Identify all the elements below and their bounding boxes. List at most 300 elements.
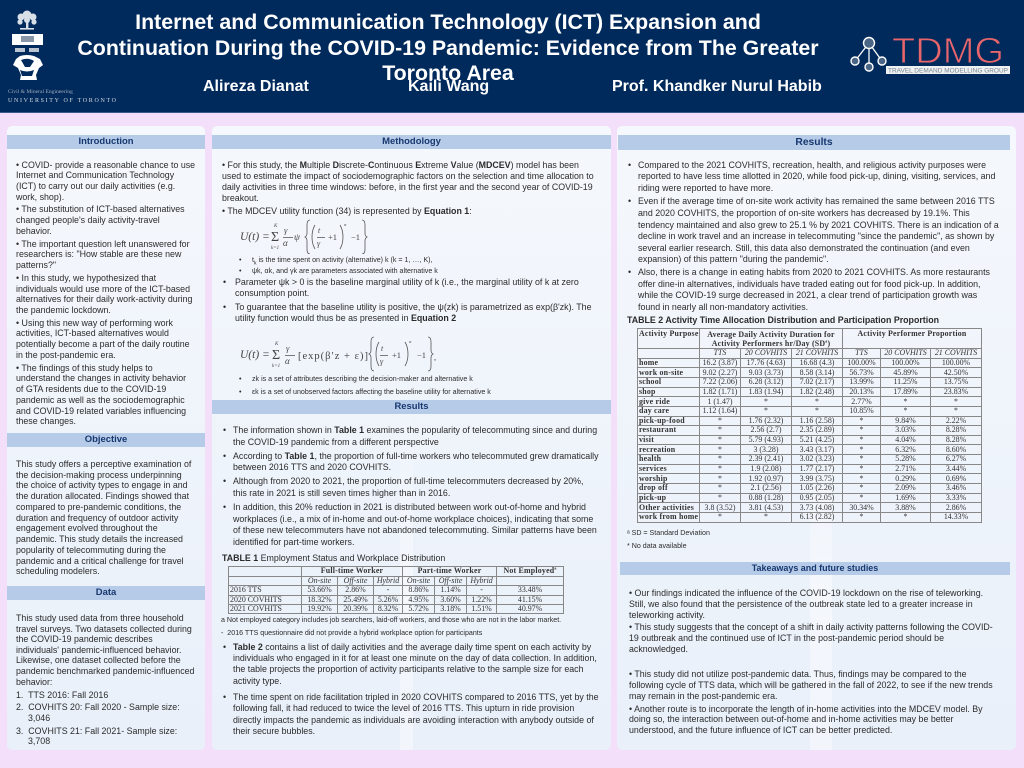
table 2: 5.28%	[895, 455, 916, 463]
text: takeaways part 2: understood, and the future influence of ICT can be better predicted.	[629, 725, 892, 735]
text: right results bullets: and 2020 COVHITS, the proportion of on-site workers has decreased by 19.1%. This	[638, 208, 970, 218]
text: introduction bullets: pandemic as well as the sociodemographic	[16, 395, 185, 405]
table 2: *	[860, 484, 863, 492]
text: right results bullets: Even if the average time of on-site work activity has remained the same between 2016 TTS	[638, 196, 995, 206]
text: parameter note: To guarantee that the baseline utility is positive, the ψ(zk) is parametrized as exp(β'zk). The	[235, 302, 592, 312]
list: data sources: 3,708	[28, 736, 50, 746]
equation 1: K	[273, 224, 278, 229]
table 2: worship	[639, 474, 668, 483]
text: objective: the choice of activity types to engage in and	[16, 480, 188, 490]
table 2: 14.33%	[944, 512, 968, 521]
table 2: 45.89%	[893, 368, 918, 377]
text: objective: pandemic and a critical challenge for travel	[16, 556, 184, 566]
table 2: 1.83 (1.94)	[749, 387, 783, 396]
text: introduction bullets: and COVID-19 related variables influencing	[16, 406, 186, 416]
text: table 2 commentary: the table projects the proportion of activity participants relative to the sample size for each	[233, 664, 584, 674]
author: Prof. Khandker Nurul Habib: Prof. Khandker Nurul Habib	[612, 78, 822, 95]
text: data description: travel surveys. Two datasets collected during	[16, 624, 192, 634]
heading: Table 1 caption: TABLE 1 Employment Status and Workplace Distribution	[222, 552, 445, 562]
text: •	[223, 425, 226, 435]
table 2: 2.1 (2.56)	[751, 484, 781, 492]
heading: Results (right)	[618, 134, 1010, 150]
text: results bullets: the COVID-19 pandemic from a different perspective	[233, 437, 439, 447]
equation 1: −1	[351, 232, 360, 242]
text: table 2 commentary: individuals who engaged in it for at least one minute on the day of data collection. In addition,	[233, 653, 597, 663]
heading: Objective	[7, 433, 205, 447]
table 2: 3.81 (4.53)	[749, 503, 783, 512]
equation 2: −1	[417, 350, 426, 360]
text: introduction bullets: (ICT) to carry out our daily activities (e.g.	[16, 181, 175, 191]
table 2: 100.00%	[891, 358, 920, 367]
heading: Results (right): Results	[795, 136, 833, 148]
text: equation 2 notes: εk is a set of unobserved factors affecting the baseline utility for alternative k	[252, 388, 491, 396]
text: objective	[16, 459, 192, 576]
text: table 2 commentary	[223, 642, 599, 736]
table 2: 1.92 (0.97)	[749, 474, 783, 483]
text: methodology intro: • For this study, the Multiple Discrete-Continuous Extreme Value (MDCEV) model has been	[222, 160, 579, 170]
text: objective: the decision-making process underpinning	[16, 470, 182, 480]
heading: Data: Data	[96, 587, 116, 598]
equation 2: t	[381, 344, 384, 353]
table 2: *	[718, 426, 722, 434]
table 2: 8.58 (3.14)	[800, 368, 834, 377]
table 2: services	[639, 464, 667, 473]
equation 1: γ	[284, 225, 288, 235]
text: introduction bullets: • The substitution of ICT-based alternatives	[16, 204, 185, 214]
text: takeaways part 1: • This study suggests that the concept of a shift in daily activity patterns following the COVID-	[629, 622, 993, 632]
table 2: *	[860, 426, 863, 434]
equation 1: α	[344, 222, 347, 227]
table 2: 0.95 (2.05)	[800, 493, 834, 502]
table 2: 1.16 (2.58)	[800, 416, 834, 425]
table 2: give ride	[639, 397, 670, 406]
table 2: 13.99%	[849, 377, 874, 386]
table 2: 3.33%	[946, 493, 966, 502]
text: introduction bullets: individuals would use more of the ICT-based	[16, 284, 190, 294]
text: introduction bullets: alternatives for their daily work-activity during	[16, 294, 192, 304]
text: results bullets: The information shown in Table 1 examines the popularity of telecommuting since and during	[233, 425, 597, 435]
text: takeaways part 2	[629, 669, 993, 735]
heading: Methodology	[212, 135, 611, 149]
table 2: *	[718, 512, 722, 521]
text: right results bullets	[628, 160, 999, 312]
table 2: *	[718, 484, 722, 492]
text: introduction bullets: understand the changes in activity behavior	[16, 373, 186, 383]
table 1: -	[480, 585, 483, 594]
table 2: pick-up	[639, 493, 666, 502]
text: right results bullets: offer dine-in alternatives, individuals have traded eating out for food pick-up. In addition,	[638, 279, 981, 289]
table 2: 4.04%	[895, 435, 916, 444]
text: results bullets: Although from 2020 to 2021, the proportion of full-time telecommuters decreased by 20%,	[233, 476, 584, 486]
table 1: Part-time Worker	[418, 566, 481, 575]
text: takeaways part 1: Still, we also found that the persistence of the outbreak state led to a greater increase in	[629, 599, 973, 609]
equation 2: U(t) =	[240, 349, 270, 361]
heading: Results (middle)	[212, 400, 611, 414]
equation 2: Σ	[272, 348, 280, 363]
table 2: *	[904, 512, 907, 521]
text: takeaways part 1	[629, 588, 993, 654]
logo: University of Toronto: UNIVERSITY OF TORONTO	[8, 98, 117, 104]
table 2: Average Daily Activity Duration for	[707, 330, 835, 338]
table 2: 3.44%	[946, 464, 966, 473]
panel: middle column	[212, 126, 611, 750]
heading: Table 2 caption: TABLE 2 Activity Time Allocation Distribution and Participation Proportion	[627, 315, 939, 325]
text: methodology intro: used to estimate the impact of sociodemographic factors on the selection and time allocation to	[222, 171, 594, 181]
text: data description: This study used data from three household	[16, 613, 184, 623]
text: table 2 commentary: their secure bubbles.	[233, 726, 315, 736]
table 2: 20 COVHITS	[745, 348, 787, 357]
table 2: *	[860, 474, 863, 483]
table 2: *	[718, 474, 722, 483]
table 2: Activity Purpose	[639, 329, 699, 338]
text: right results bullets: riding were reported to have more.	[638, 183, 773, 193]
heading: Introduction: Introduction	[78, 136, 134, 146]
table 2: *	[860, 512, 863, 521]
table 2: *	[764, 406, 768, 415]
text: takeaways part 2: doing so, the interaction between out-of-home and in-home activities may be better	[629, 714, 953, 724]
table 2: recreation	[639, 445, 675, 454]
text: data description: pandemic benchmarked pandemic-influenced	[16, 666, 194, 676]
table 2: 1.76 (2.32)	[749, 416, 783, 425]
table 2: 1.69%	[895, 493, 916, 502]
table 2: Other activities	[639, 503, 694, 512]
table 2: health	[639, 455, 661, 463]
text: table 2 commentary: activity type.	[233, 676, 282, 686]
text: takeaways part 1: 19 outbreak and the continued use of ICT in the post-pandemic period should be	[629, 633, 944, 643]
table 2: 17.89%	[893, 387, 918, 396]
table 1: -	[387, 585, 389, 594]
text: •	[239, 256, 241, 264]
table 2: 2.39 (2.41)	[749, 455, 783, 463]
text: •	[223, 277, 226, 287]
author: Kaili Wang: Kaili Wang	[408, 78, 489, 95]
heading: Takeaways and future studies: Takeaways and future studies	[752, 562, 878, 572]
text: objective: the duration allocated. Findings showed that	[16, 491, 189, 501]
table 2: 7.02 (2.17)	[800, 377, 834, 386]
text: equation 2 notes	[239, 374, 491, 396]
text: right results bullets: Also, there is a change in eating habits from 2020 to 2021 COVHITS. As more restaurants	[638, 267, 990, 277]
table 2: 1.77 (2.17)	[800, 464, 834, 473]
table 2: Activity Performers hr/Day (SDa)	[712, 338, 830, 348]
text: right results bullets: reported to have less time allotted in 2020, while food pick-up, dining, visiting, services, and	[638, 171, 995, 181]
heading: Objective: Objective	[85, 434, 127, 445]
title: Continuation During the COVID-19 Pandemic: Evidence from The Greater	[77, 36, 819, 60]
table 2: *	[718, 416, 722, 425]
text: table 2 commentary: The time spent on ride facilitation tripled in 2020 COVHITS compared to 2016 TTS, yet by the	[233, 692, 599, 702]
table 2: 16.2 (3.87)	[703, 358, 737, 367]
table 1: 2016 TTS	[230, 585, 262, 594]
table 2: 3.46%	[946, 484, 966, 492]
text: introduction bullets: these changes.	[16, 416, 76, 426]
table 2: 1.82 (1.71)	[703, 387, 737, 396]
table 2: 0.69%	[946, 474, 966, 483]
table 2: *	[860, 416, 863, 425]
text: results bullets: identified for part-time workers.	[233, 537, 354, 547]
table 2: *	[904, 397, 907, 406]
table 2: 2.86%	[946, 503, 966, 512]
text: •	[628, 196, 631, 206]
text: objective: scheduling modelers.	[16, 566, 100, 576]
table 2: *	[860, 493, 863, 502]
table 2: 100.00%	[847, 358, 876, 367]
table 2: school	[639, 377, 661, 386]
text: takeaways part 2: may remain in the post-pandemic era.	[629, 691, 777, 701]
text: table 2 notes	[627, 529, 710, 550]
table 2: TTS	[714, 348, 726, 357]
table 2: restaurant	[639, 426, 676, 434]
list: data sources: 3,046	[28, 713, 50, 723]
table 2: 6.32%	[895, 445, 916, 454]
equation 1	[240, 220, 368, 254]
text: table 2 commentary: directly impacts the pandemic as individuals are avoiding interaction with anybody outside of	[233, 715, 594, 725]
text: introduction bullets: work, shop).	[16, 192, 64, 202]
table 2: *	[718, 464, 722, 473]
table 2: 3.43 (3.17)	[800, 445, 834, 454]
table 2: 30.34%	[849, 503, 874, 512]
table 2: 1.05 (2.26)	[800, 484, 834, 492]
text: introduction bullets: of GTA residents due to the COVID-19	[16, 384, 166, 394]
text: •	[628, 267, 631, 277]
panel: right column	[617, 126, 1016, 750]
table 2: 3.02 (3.23)	[800, 455, 834, 463]
table 2: 42.50%	[944, 368, 968, 377]
text: parameter note: Parameter ψk > 0 is the baseline marginal utility of k (i.e., the marginal utility of k at zero	[235, 277, 579, 287]
table 2: TTS	[855, 348, 868, 357]
table 1: 8.86%	[408, 585, 429, 594]
text: equation 1 notes: tk is the time spent on activity (alternative) k (k = 1, …, K),	[252, 256, 433, 266]
table 2: *	[718, 455, 722, 463]
table 2: *	[860, 445, 863, 454]
text: introduction bullets: Internet and Communication Technology	[16, 170, 174, 180]
text: right results bullets: while the COVID-19 surge decreased in 2021, a clear trend of participation growth was	[638, 290, 977, 300]
table 2: *	[860, 435, 863, 444]
table 2: 2.71%	[895, 464, 916, 473]
text: right results bullets: expansion) of this pattern "during the pandemic".	[638, 254, 829, 264]
title: Internet and Communication Technology (ICT) Expansion and	[135, 10, 761, 34]
table 2: 2.56 (2.7)	[751, 426, 781, 434]
text: results bullets	[223, 425, 599, 547]
text: introduction bullets: • The important question left unanswered for	[16, 239, 190, 249]
text: •	[223, 302, 226, 312]
table 2: 2.35 (2.89)	[800, 426, 834, 434]
text: table 2 commentary: following fall, it had reduced to twice the level of 2016 TTS. This upturn in ride provision	[233, 703, 574, 713]
table 1: 33.48%	[518, 585, 542, 594]
table 2: *	[954, 406, 958, 415]
equation 1: U(t) =	[240, 231, 270, 243]
equation 2: ,	[434, 352, 436, 362]
text: right results bullets: several earlier research. Still, this data also demonstrated the continuation (and even	[638, 243, 970, 253]
table 2: 7.22 (2.06)	[703, 377, 737, 386]
table 2: 1.12 (1.64)	[703, 406, 737, 415]
table 2: 21 COVHITS	[935, 348, 977, 357]
table 2: 6.28 (3.12)	[749, 377, 783, 386]
text: •	[223, 476, 226, 486]
text: introduction bullets: changed people's daily activity-travel	[16, 215, 160, 225]
text: equation 2 notes: zk is a set of attributes describing the decision-maker and alternative k	[252, 374, 473, 382]
text: introduction bullets: the pandemic lockdown.	[16, 305, 111, 315]
table 2: *	[764, 512, 768, 521]
table 2: 0.88 (1.28)	[749, 493, 783, 502]
text: results bullets: According to Table 1, the proportion of full-time workers who telecommuted grew dramatically	[233, 451, 599, 461]
equation 2	[240, 336, 436, 372]
table 2: 100.00%	[942, 358, 970, 367]
equation 2: k=1	[272, 364, 280, 369]
text: objective: engagement evolved throughout the	[16, 523, 158, 533]
text: equation 1 notes	[239, 256, 438, 275]
text: right results bullets: found in nearly all non-mandatory activities.	[638, 302, 808, 312]
title: Toronto Area	[382, 61, 514, 85]
table 2	[637, 328, 982, 523]
text: table 2 notes: ᵃ SD = Standard Deviation	[627, 529, 710, 537]
text: results bullets: workplaces (i.e., a mix of in-home and out-of-home workplace choices), indicating that some	[233, 514, 593, 524]
logo: University of Toronto: Civil & Mineral Engineering	[8, 89, 73, 95]
table 2: 3.73 (4.08)	[800, 503, 834, 512]
text: takeaways part 2: following cycle of TTS data, which will be gathered in the fall of 2022, to see if the new trends	[629, 680, 993, 690]
text: takeaways part 1: teleworking activity.	[629, 610, 705, 620]
table 2: 2.09%	[895, 484, 916, 492]
text: •	[223, 642, 226, 652]
text: methodology intro: • The MDCEV utility function (34) is represented by Equation 1:	[222, 206, 472, 216]
text: data description	[16, 613, 194, 687]
list: data sources: 3. COVHITS 21: Fall 2021- Sample size:	[16, 726, 177, 736]
text: parameter note: utility function would thus be as presented in Equation 2	[235, 313, 456, 323]
table 2: *	[904, 406, 907, 415]
table 2: 10.85%	[849, 406, 874, 415]
text: table 1 notes: a Not employed category includes job searchers, laid-off workers, and those who are not in the labor market.	[221, 616, 561, 624]
text: •	[239, 374, 241, 382]
equation 2: K	[274, 342, 279, 347]
table 2: *	[764, 397, 768, 406]
text: introduction bullets: patterns?"	[16, 260, 56, 270]
table 2: 6.27%	[946, 455, 966, 463]
text: introduction bullets: researchers is: "How stable are these new	[16, 249, 181, 259]
table 2: 6.13 (2.82)	[800, 512, 834, 521]
heading: Takeaways and future studies	[620, 562, 1010, 574]
equation 1: k=1	[271, 246, 279, 251]
text: results bullets: this rate in 2021 is still seven times higher than in 2016.	[233, 488, 450, 498]
table 2: *	[954, 397, 958, 406]
table 2: 9.02 (2.27)	[703, 368, 737, 377]
logo: TDMG	[850, 32, 1010, 74]
text: table 2 commentary: Table 2 contains a list of daily activities and the average daily time spent on each activity by	[233, 642, 591, 652]
text: •	[223, 502, 226, 512]
table 2: 17.76 (4.63)	[747, 358, 785, 367]
table 2: 9.84%	[895, 416, 916, 425]
heading: Results (middle): Results	[394, 401, 429, 412]
text: methodology intro: breakout.	[222, 193, 259, 203]
table 2: 1.82 (2.48)	[800, 387, 834, 396]
text: introduction bullets: potentially become a part of the daily routine	[16, 339, 190, 349]
table 2: 1.9 (2.08)	[751, 464, 781, 473]
header banner	[0, 0, 1024, 113]
text: objective: compared to pre-pandemic conditions, the	[16, 502, 181, 512]
text: data description: individuals' pandemic-influenced behavior.	[16, 645, 181, 655]
text: introduction bullets: • The findings of this study helps to	[16, 363, 153, 373]
table 2: 9.03 (3.73)	[749, 368, 783, 377]
equation 1: ψ	[294, 233, 301, 243]
table 2: *	[860, 455, 863, 463]
title	[77, 10, 819, 85]
text: results bullets: of these new telecommuters have not abandoned telecommuting. Similar patterns have been	[233, 525, 597, 535]
text: takeaways part 1: • Our findings indicated the influence of the COVID-19 lockdown on the rise of teleworking.	[629, 588, 983, 598]
table 2: 23.83%	[944, 387, 968, 396]
table 2: work from home	[639, 512, 698, 521]
text: introduction bullets: • In this study, we hypothesized that	[16, 273, 156, 283]
table 2: *	[718, 445, 722, 454]
author: Alireza Dianat: Alireza Dianat	[203, 78, 309, 95]
text: objective: popularity of telecommuting during the	[16, 545, 166, 555]
text: objective: This study offers a perceptive examination of	[16, 459, 191, 469]
table 1	[228, 566, 564, 614]
text: results bullets: between 2016 TTS and 2020 COVHITS.	[233, 462, 391, 472]
table 1: 2.86%	[345, 585, 366, 594]
heading: Data	[7, 586, 205, 600]
list: data sources: 1. TTS 2016: Fall 2016	[16, 690, 108, 700]
equation 2: +1	[392, 350, 401, 360]
text: •	[223, 451, 226, 461]
table 2: day care	[639, 406, 669, 415]
equation 2: α	[285, 356, 290, 366]
list: data sources	[16, 690, 180, 746]
text: introduction bullets	[16, 160, 195, 426]
table 1: 1.14%	[440, 585, 461, 594]
table 2: 20.13%	[849, 387, 874, 396]
text: parameter note	[223, 277, 592, 323]
equation 1: +1	[328, 232, 337, 242]
table 2: 3 (3.28)	[754, 445, 778, 454]
text: results bullets: In addition, this 20% reduction in 2021 is distributed between work out-of-home and hybrid	[233, 502, 586, 512]
text: •	[239, 267, 241, 275]
panel: left column	[7, 126, 205, 750]
table 2: 11.25%	[893, 377, 918, 386]
table 2: drop off	[639, 484, 668, 492]
table 2: visit	[639, 435, 654, 444]
table 2: home	[639, 358, 658, 367]
text: objective: pandemic. This study details the increased	[16, 534, 183, 544]
text: introduction bullets: activities, ICT-based alternatives would	[16, 328, 169, 338]
table 2: 20 COVHITS	[884, 348, 927, 357]
logo: University of Toronto	[8, 10, 117, 104]
table 2: *	[718, 435, 722, 444]
table 2: 8.60%	[946, 445, 966, 454]
table 2: 13.75%	[944, 377, 968, 386]
table 2: 3.03%	[895, 426, 916, 434]
text: introduction bullets: behavior.	[16, 226, 52, 236]
equation 1: t	[318, 226, 321, 235]
table 1: Full-time Worker	[321, 566, 383, 575]
text: methodology intro: daily activities in three time windows: before, in the first year and the second year of COVID-19	[222, 182, 593, 192]
table 2: *	[815, 406, 819, 415]
table 2: Activity Performer Proportion	[858, 329, 966, 338]
table 2: 16.68 (4.3)	[800, 358, 834, 367]
table 2: *	[718, 493, 722, 502]
table 2: 8.28%	[946, 426, 966, 434]
heading: Methodology: Methodology	[382, 136, 441, 147]
text: introduction bullets: in the post-pandemic era.	[16, 350, 116, 360]
text: objective: duration and frequency of outdoor activity	[16, 513, 178, 523]
equation 2: γ	[286, 343, 290, 353]
text: table 2 notes: * No data available	[627, 542, 687, 550]
table 2: *	[860, 464, 863, 473]
equation 1: α	[283, 238, 288, 248]
table 2: 2.77%	[851, 397, 872, 406]
text: takeaways part 1: acknowledged.	[629, 644, 688, 654]
text: takeaways part 2: • This study did not utilize post-pandemic data. Thus, findings may be compared to the	[629, 669, 967, 679]
table 2: 56.73%	[849, 368, 874, 377]
heading: Introduction	[7, 134, 205, 148]
table 1: 53.66%	[307, 585, 332, 594]
text: takeaways part 2: • Another route is to incorporate the length of in-home activities into the MDCEV model. By	[629, 704, 983, 714]
